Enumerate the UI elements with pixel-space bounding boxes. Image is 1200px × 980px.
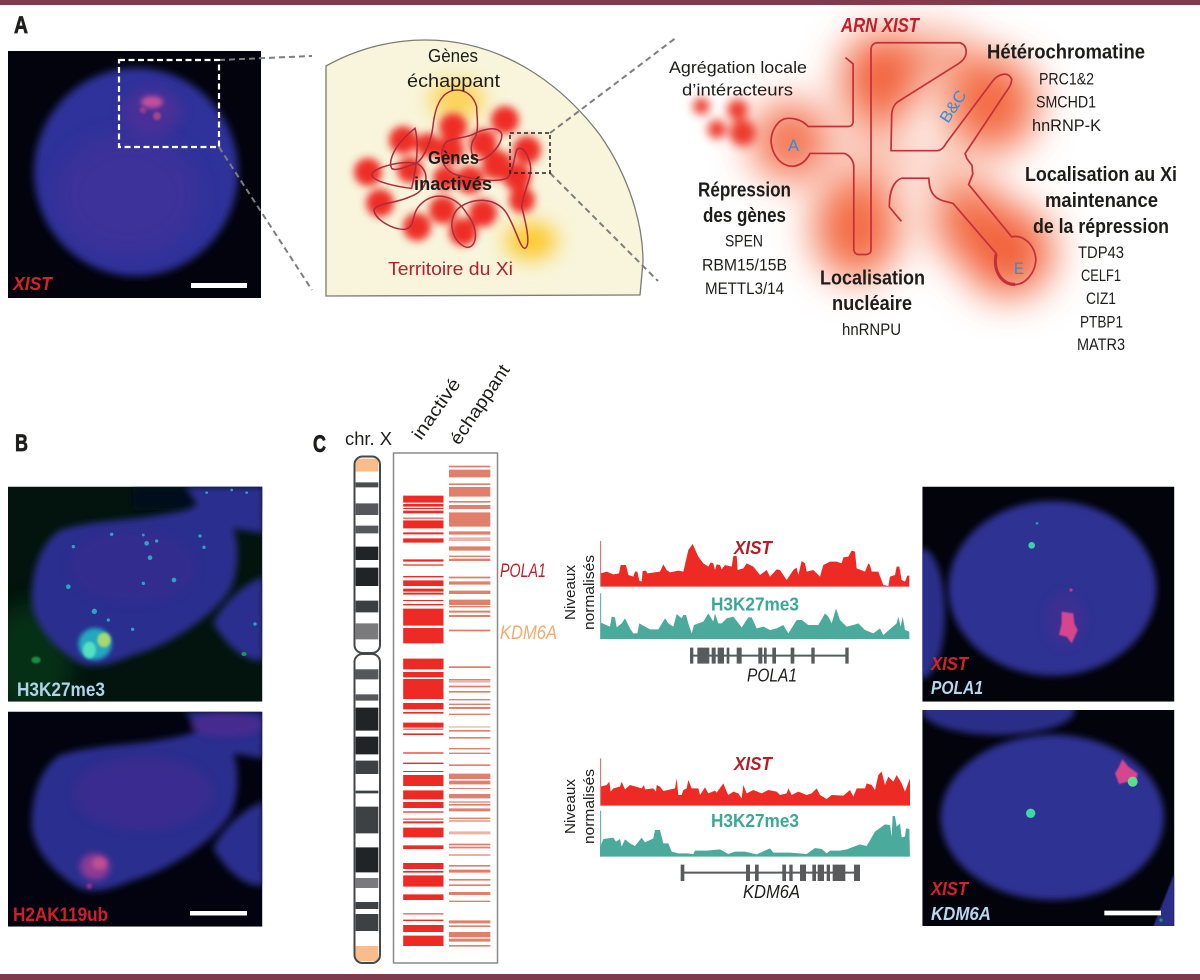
chromatin curve	[372, 90, 531, 248]
axis label: normalisés	[581, 555, 598, 630]
block: localisation nucléaire: nucléaire	[832, 293, 912, 315]
micrograph: XIST and POLA1	[898, 487, 1174, 702]
block: localisation au Xi: de la répression	[1033, 216, 1169, 238]
block: répression des gènes: des gènes	[703, 205, 786, 227]
label: gènes inactivés: Gènes	[428, 148, 479, 168]
gene model KDM6A	[681, 865, 860, 881]
H3K27me3 area track	[601, 608, 909, 639]
label: gènes échappant	[407, 46, 500, 91]
label: gènes échappant: Gènes	[428, 46, 478, 66]
panel letter B: B	[15, 430, 28, 457]
RNA domain letters	[788, 88, 1024, 278]
track label: XIST: XIST	[733, 754, 774, 774]
label: agrégation locale: d’intéracteurs	[682, 80, 793, 100]
gene name KDM6A: KDM6A	[743, 882, 800, 902]
domain E: E	[1014, 259, 1024, 278]
block: localisation au Xi: MATR3	[1077, 335, 1125, 354]
block: hétérochromatine: Hétérochromatine	[987, 42, 1145, 64]
heading: inactivé: inactivé	[408, 374, 464, 443]
heading: échappant: échappant	[446, 361, 514, 448]
panel letter C: C	[313, 431, 326, 458]
label: KDM6A on image: KDM6A	[931, 904, 991, 924]
label: agrégation locale	[669, 58, 807, 100]
label: agrégation locale: Agrégation locale	[669, 58, 807, 77]
block: répression des gènes: Répression	[698, 180, 791, 202]
block: hétérochromatine: PRC1&2	[1039, 70, 1094, 88]
panel: territoire du Xi	[326, 40, 643, 296]
inactivated gene bars	[363, 496, 484, 946]
scale bar B	[190, 911, 247, 916]
label: XIST on POLA1 image: XIST	[930, 654, 970, 674]
RNA line	[771, 43, 1036, 284]
chromosome X ideogram	[354, 456, 380, 963]
label: territoire du Xi: Territoire du Xi	[388, 259, 513, 279]
bottom border	[0, 974, 1200, 980]
gene name POLA1: POLA1	[747, 666, 797, 686]
label: XIST on KDM6A image: XIST	[930, 879, 970, 899]
block: localisation au Xi: CIZ1	[1086, 289, 1116, 308]
panel: XIST RNA structure	[693, 28, 1053, 297]
red inactivated gene spots	[354, 106, 541, 246]
chart: KDM6A tracks	[562, 754, 910, 902]
block: localisation nucléaire: hnRNPU	[842, 320, 901, 339]
gene label: POLA1: POLA1	[500, 561, 546, 582]
track label: XIST: XIST	[733, 538, 774, 558]
block: répression des gènes: SPEN	[725, 232, 763, 250]
block: localisation au Xi: Localisation au Xi	[1025, 164, 1177, 186]
axis label	[562, 555, 598, 630]
micrograph: XIST and KDM6A	[922, 710, 1174, 926]
track label: H3K27me3: H3K27me3	[711, 594, 799, 614]
H3K27me3 area track	[600, 816, 910, 857]
gene label: KDM6A: KDM6A	[500, 623, 557, 644]
axis label: Niveaux	[562, 565, 579, 620]
axis label: normalisés	[581, 769, 598, 844]
block: localisation au Xi: maintenance	[1045, 190, 1158, 212]
block: hétérochromatine: hnRNP-K	[1032, 116, 1102, 135]
block: localisation au Xi: PTBP1	[1080, 312, 1123, 332]
label: chr. X: chr. X	[345, 429, 392, 449]
domain A: A	[788, 136, 800, 155]
zoom lines from territory to RNA	[550, 37, 677, 281]
gene map box	[394, 453, 498, 963]
axis label: Niveaux	[562, 779, 579, 834]
axis label	[562, 769, 598, 844]
selection square on micrograph	[119, 60, 219, 147]
selection square on territory	[510, 133, 550, 173]
block: répression des gènes: RBM15/15B	[702, 256, 787, 274]
label: POLA1 on image: POLA1	[931, 678, 983, 698]
local interactor spots	[693, 98, 756, 146]
domain B and C: B&C	[937, 88, 970, 126]
label: gènes inactivés: inactivés	[414, 174, 492, 194]
block: localisation au Xi: TDP43	[1078, 243, 1124, 262]
panel B: H3K27me3 micrograph	[0, 487, 263, 717]
label: XIST: XIST	[12, 274, 54, 294]
escaping gene bars	[408, 466, 532, 947]
title: ARN XIST: ARN XIST	[840, 15, 920, 37]
label: H3K27me3 on micrograph: H3K27me3	[17, 680, 105, 701]
yellow escaping gene halos	[430, 80, 557, 260]
axes	[599, 758, 602, 806]
orange glow	[751, 28, 1053, 297]
block: répression des gènes: METTL3/14	[705, 279, 784, 298]
column headings	[408, 361, 514, 448]
gene model POLA1	[690, 648, 849, 664]
XIST area track	[601, 772, 910, 806]
XIST area track	[601, 544, 909, 587]
top border	[0, 0, 1200, 5]
panel A: nucleus micrograph	[8, 51, 261, 298]
panel B: H2AK119ub micrograph	[8, 712, 263, 927]
block: localisation au Xi: CELF1	[1081, 266, 1121, 285]
block: hétérochromatine: SMCHD1	[1036, 92, 1096, 112]
label: gènes échappant: échappant	[407, 71, 500, 91]
track label: H3K27me3: H3K27me3	[711, 811, 799, 831]
chart: POLA1 tracks	[562, 538, 909, 686]
label: H2AK119ub: H2AK119ub	[13, 905, 108, 926]
axes	[599, 541, 602, 587]
zoom lines from micrograph to territory	[219, 56, 312, 290]
label: gènes inactivés	[414, 148, 492, 194]
panel letter A: A	[14, 12, 28, 39]
block: localisation nucléaire: Localisation	[820, 268, 925, 290]
